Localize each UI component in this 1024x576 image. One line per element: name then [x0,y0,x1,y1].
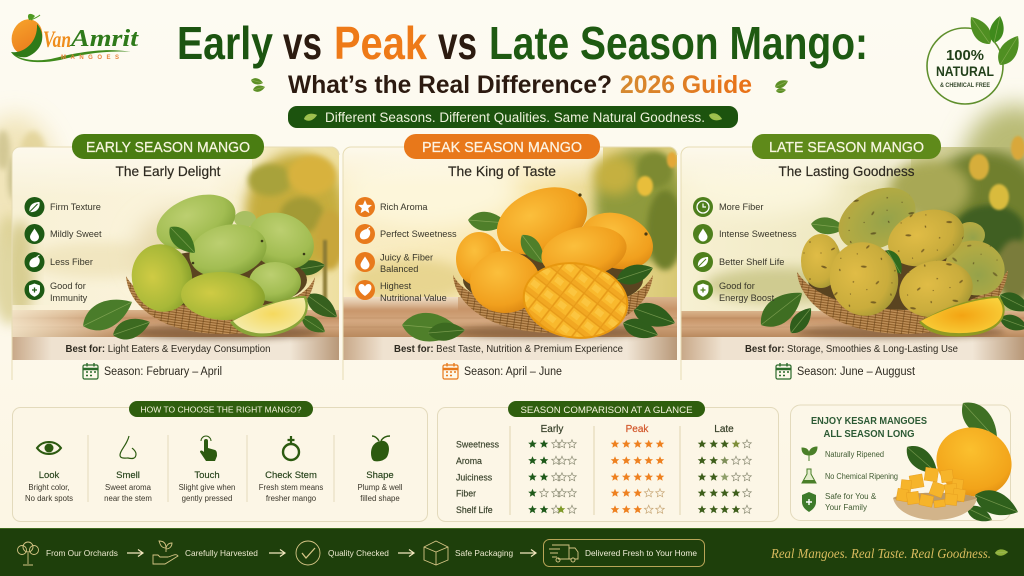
logo: VanAmrit Mangoes [7,14,140,62]
step: delivered fresh: Delivered Fresh to Your Home [585,548,697,558]
season: late: Season: June – Auggust [797,366,916,378]
ratings: late [698,440,751,513]
season: late [776,363,916,379]
feature: mildly sweet: Mildly Sweet [50,229,102,239]
tagline pill: Different Seasons. Different Qualities. Same Natural Goodness. [325,110,705,125]
tip: smell: Sweet aroma [105,483,152,492]
feature: good for immunity: Good for [50,281,86,291]
feature: juicy and fiber balanced: Juicy & Fiber [380,252,433,262]
heading pill: how to choose [129,401,313,417]
tip: smell: Smell [116,470,140,481]
heading pill: early: EARLY SEASON MANGO [86,139,250,156]
panel heading: ALL SEASON LONG [824,429,915,440]
panel outline [12,147,339,380]
benefit: no chemical ripening: No Chemical Ripening [825,472,898,481]
best for: late: Best for: Storage, Smoothies & Long-Lasting Use [745,344,959,355]
column headers: Late [714,424,734,435]
background foliage: left [0,115,57,325]
step: quality checked: Quality Checked [328,548,389,558]
season: early: Season: February – April [104,366,222,378]
panel outline [343,147,677,380]
column headers [541,424,734,435]
row labels: Juiciness [456,472,493,482]
heading pill: peak: PEAK SEASON MANGO [422,139,582,156]
feature list: early [24,197,102,303]
panel: peak season [340,134,685,380]
tip: shape: filled shape [360,494,400,503]
benefit: naturally ripened [802,447,884,461]
panel: late season [680,134,1024,380]
step: carefully harvested [153,541,258,564]
season: early [83,363,222,379]
row labels: Sweetness [456,440,500,450]
tip: look: Look [39,470,60,481]
tip: shape: Plump & well [357,483,403,492]
tip: look: Bright color, [28,483,70,492]
feature: good for immunity: Immunity [50,293,88,303]
row labels: Fiber [456,488,476,498]
illustration: basket of late mangoes [753,175,1024,339]
feature: perfect sweetness: Perfect Sweetness [380,229,457,239]
tip: touch [179,436,235,503]
feature list: late [693,197,797,303]
slogan: Real Mangoes. Real Taste. Real Goodness. [770,547,991,562]
feature: firm texture: Firm Texture [50,202,101,212]
best for: early: Best for: Light Eaters & Everyday Consumption [66,344,270,355]
step: safe packaging [424,541,514,565]
feature: energy boost: Energy Boost [719,293,775,303]
background foliage: right [960,105,1024,250]
column headers: Peak [626,424,649,435]
badge: 100% natural [927,12,1024,104]
feature: highest nutritional value [355,280,447,303]
icon: subtitle leaf left [250,77,266,93]
tip: look: No dark spots [25,494,73,503]
benefit: naturally ripened: Naturally Ripened [825,450,884,459]
step: from our orchards [18,542,118,565]
tip: touch: gently pressed [182,494,232,503]
heading pill: early [72,134,264,159]
illustration: basket of green mangoes [77,184,342,344]
benefit: safe for family: Safe for You & [825,492,877,501]
tip: shape [357,436,403,503]
row labels: Aroma [456,456,482,466]
panel heading [811,416,927,440]
heading pill: peak [404,134,600,159]
tip: shape: Shape [366,470,394,481]
arrow [520,550,536,556]
tip: check stem: Check Stem [265,470,317,481]
footer band [0,528,1024,576]
panel: early season [5,134,345,380]
logo: VanAmrit Mangoes: MANGOES [61,55,119,61]
row labels [456,440,500,515]
step: delivered fresh [544,540,704,566]
feature: energy boost: Good for [719,281,755,291]
subheading: peak: The King of Taste [448,163,556,179]
tip: check stem: Fresh stem means [259,483,323,492]
row labels: Shelf Life [456,505,493,515]
tip: check stem [259,436,323,503]
panel: season comparison [438,401,778,522]
logo: VanAmrit Mangoes: Van [43,27,71,52]
panel heading: ENJOY KESAR MANGOES [811,416,927,427]
title: vs [283,17,322,69]
title [177,17,868,69]
ratings: early [528,440,576,513]
panel outline [681,147,760,380]
best for: peak: Best for: Best Taste, Nutrition & Premium Experience [394,344,624,355]
ratings: peak [611,440,664,513]
subheading: early: The Early Delight [116,163,221,179]
tagline pill [288,106,738,128]
season: peak: Season: April – June [464,366,562,378]
panel: how to choose [12,401,428,522]
subtitle: What’s the Real Difference? [288,71,612,99]
arrow [269,550,285,556]
heading pill: late [752,134,941,159]
feature: less fiber: Less Fiber [50,257,93,267]
season: peak [443,363,562,379]
tip: smell [104,436,152,503]
tip: touch: Slight give when [179,483,235,492]
heading pill: how to choose: HOW TO CHOOSE THE RIGHT MANGO? [140,404,302,414]
heading pill: comparison: SEASON COMPARISON AT A GLANCE [520,405,692,415]
heading pill: late: LATE SEASON MANGO [769,139,924,156]
feature: highest nutritional value: Nutritional Value [380,293,447,303]
feature: juicy and fiber balanced: Balanced [380,264,418,274]
title: vs [438,17,477,69]
feature: energy boost [693,280,775,303]
column headers: Early [541,424,563,435]
icon: subtitle leaf right [774,78,789,93]
step: safe packaging: Safe Packaging [455,548,514,558]
tip: smell: near the stem [104,494,152,503]
feature list: peak [355,197,457,303]
feature: better shelf life: Better Shelf Life [719,257,784,267]
title: Peak [334,17,427,69]
arrow [398,550,414,556]
step: quality checked [296,541,389,565]
benefit: no chemical ripening [802,469,898,483]
title: Late Season Mango: [489,17,868,69]
feature: rich aroma: Rich Aroma [380,202,428,212]
illustration: basket of ripe mangoes [402,187,675,343]
step: carefully harvested: Carefully Harvested [185,548,258,558]
feature: good for immunity [24,280,88,303]
subheading: late: The Lasting Goodness [778,163,914,179]
heading pill: comparison [508,401,705,417]
tip: check stem: fresher mango [266,494,317,503]
benefit: safe for family [802,492,877,512]
trees are painted as layered blurred blobs [245,153,345,277]
panel: enjoy kesar mangoes [790,395,1022,526]
arrow [127,550,143,556]
benefit: safe for family: Your Family [825,503,867,512]
badge: 100% natural: 100% [946,47,984,64]
badge: 100% natural: NATURAL [936,63,994,79]
illustration: mango and cubes in bowl [893,395,1022,526]
title: Early [177,17,273,69]
feature: more fiber: More Fiber [719,202,763,212]
badge: 100% natural: & CHEMICAL FREE [940,83,990,89]
logo: VanAmrit Mangoes: Amrit [69,26,140,52]
feature: juicy and fiber balanced [355,252,433,274]
step: from our orchards: From Our Orchards [46,548,118,558]
feature: highest nutritional value: Highest [380,281,412,291]
tip: look [25,442,73,503]
feature: intense sweetness: Intense Sweetness [719,229,797,239]
tip: touch: Touch [194,470,220,481]
subtitle: 2026 Guide [620,71,752,99]
orchard fruit on the right edge [969,136,1024,210]
